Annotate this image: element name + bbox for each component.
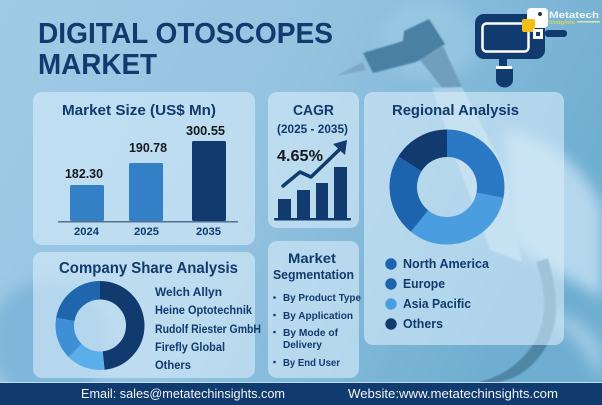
CAGR value: 4.65%: [277, 148, 323, 165]
legend: regions: Asia Pacific: [403, 296, 471, 311]
list: companies: Others: [155, 360, 191, 372]
panel: market segmentation: [268, 241, 361, 378]
bar chart: market size: 300.55: [186, 124, 225, 138]
bar chart: market size: 2025: [134, 226, 159, 238]
panel: company share analysis: [33, 252, 261, 378]
bar chart: market size: [58, 124, 238, 238]
heading: company share: Company Share Analysis: [59, 260, 238, 277]
CAGR period: (2025 - 2035): [277, 124, 348, 136]
heading: market segmentation: Market: [288, 250, 336, 266]
bar chart: market size: 2024: [74, 226, 100, 238]
list: segments: By Mode of: [283, 327, 338, 339]
panel: regional analysis: [364, 92, 564, 345]
list: companies: [155, 285, 261, 372]
footer email: Email: sales@metatechinsights.com: [81, 387, 285, 401]
legend: regions: [385, 256, 490, 331]
list: companies: Firefly Global: [155, 342, 225, 354]
heading: market size: Market Size (US$ Mn): [62, 102, 216, 119]
legend: regions: Others: [403, 316, 443, 331]
list: companies: Welch Allyn: [155, 285, 222, 299]
panel: market size: [33, 92, 255, 245]
footer website: Website:www.metatechinsights.com: [348, 387, 558, 401]
title: MARKET: [38, 49, 157, 81]
list: segments: By End User: [283, 357, 340, 369]
footer bar: [0, 382, 602, 405]
legend: regions: Europe: [403, 276, 445, 291]
list: companies: Rudolf Riester GmbH: [155, 324, 261, 336]
list: segments: [273, 292, 361, 369]
logo: Metatech Insights: [522, 8, 600, 39]
logo: Metatech Insights: Metatech: [549, 10, 599, 21]
panel: CAGR: [268, 92, 359, 228]
list: segments: Delivery: [283, 339, 322, 351]
donut chart: regional: [403, 143, 491, 231]
list: companies: Heine Optotechnik: [155, 305, 253, 317]
heading: market segmentation: [273, 250, 354, 282]
bar chart: market size: 190.78: [129, 141, 167, 155]
heading: regional analysis: Regional Analysis: [392, 102, 519, 119]
title: [38, 18, 333, 81]
bar chart: market size: 182.30: [65, 167, 103, 181]
bar chart: market size: 2035: [196, 226, 221, 238]
legend: regions: North America: [403, 256, 490, 271]
logo: Metatech Insights: Insights: [549, 20, 575, 26]
title: DIGITAL OTOSCOPES: [38, 18, 333, 50]
heading: CAGR: CAGR: [293, 103, 334, 119]
heading: market segmentation: Segmentation: [273, 267, 354, 282]
donut chart: company share: [65, 290, 135, 361]
icon: growth chart with arrow: [274, 140, 351, 220]
list: segments: By Application: [283, 310, 353, 322]
list: segments: By Product Type: [283, 292, 361, 304]
icon: digital otoscope: [475, 14, 567, 87]
